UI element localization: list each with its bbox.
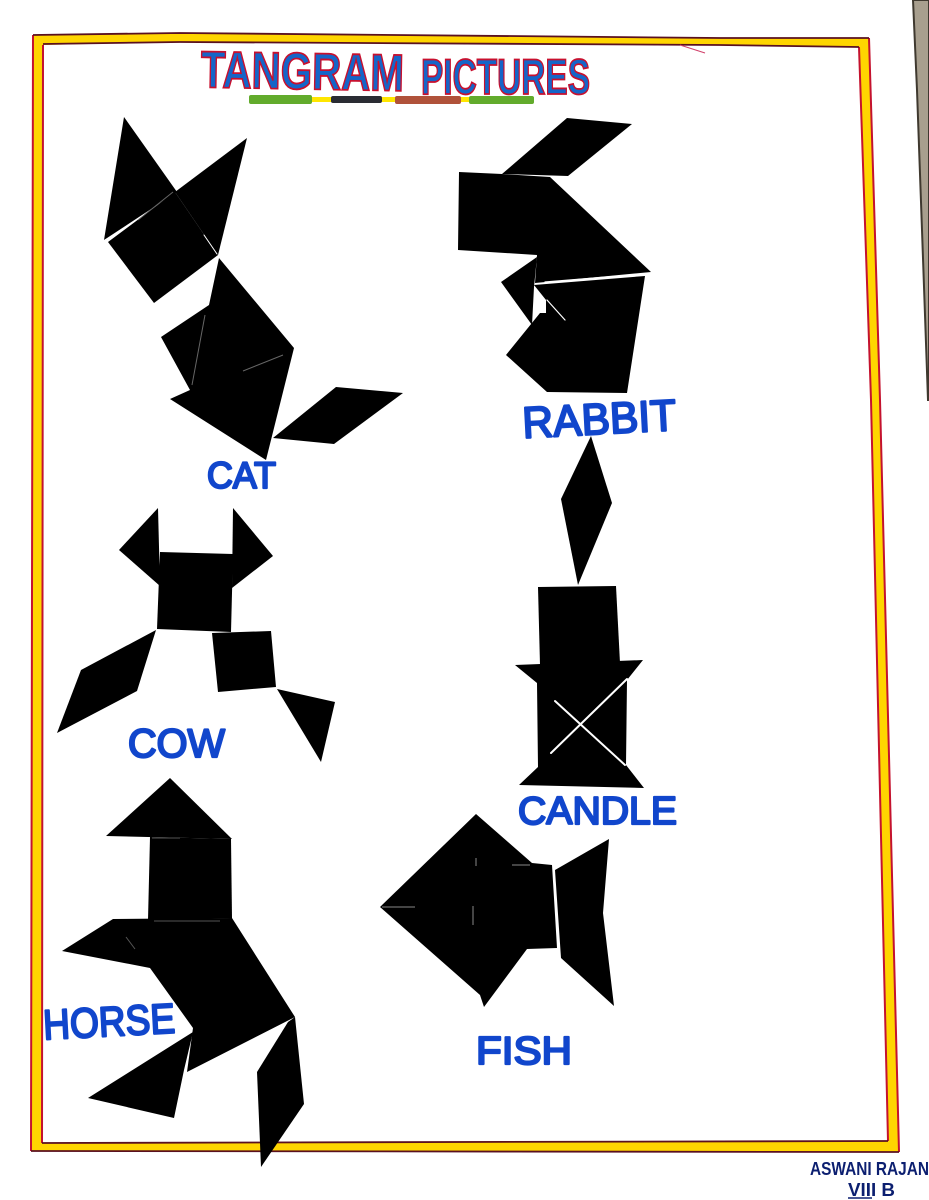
signature: VIII B (848, 1180, 895, 1200)
label: fish: FISH (476, 1030, 572, 1073)
tangram: cat (104, 117, 403, 460)
label: cat: CAT (207, 455, 276, 496)
tangram: fish (380, 814, 614, 1007)
title (200, 41, 590, 105)
signature (810, 1159, 929, 1200)
title underline (249, 95, 534, 104)
title: TANGRAM (200, 41, 404, 103)
tangram: candle (515, 436, 644, 788)
label: cow: COW (128, 722, 225, 766)
title: PICTURES (421, 49, 590, 105)
tangram: horse (62, 778, 304, 1167)
paper edge at right (913, 0, 929, 400)
label: rabbit: RABBIT (521, 391, 677, 448)
label: horse: HORSE (42, 995, 176, 1048)
tangram: cow (57, 508, 335, 762)
label: candle: CANDLE (518, 790, 677, 833)
tangram: rabbit (458, 118, 651, 393)
